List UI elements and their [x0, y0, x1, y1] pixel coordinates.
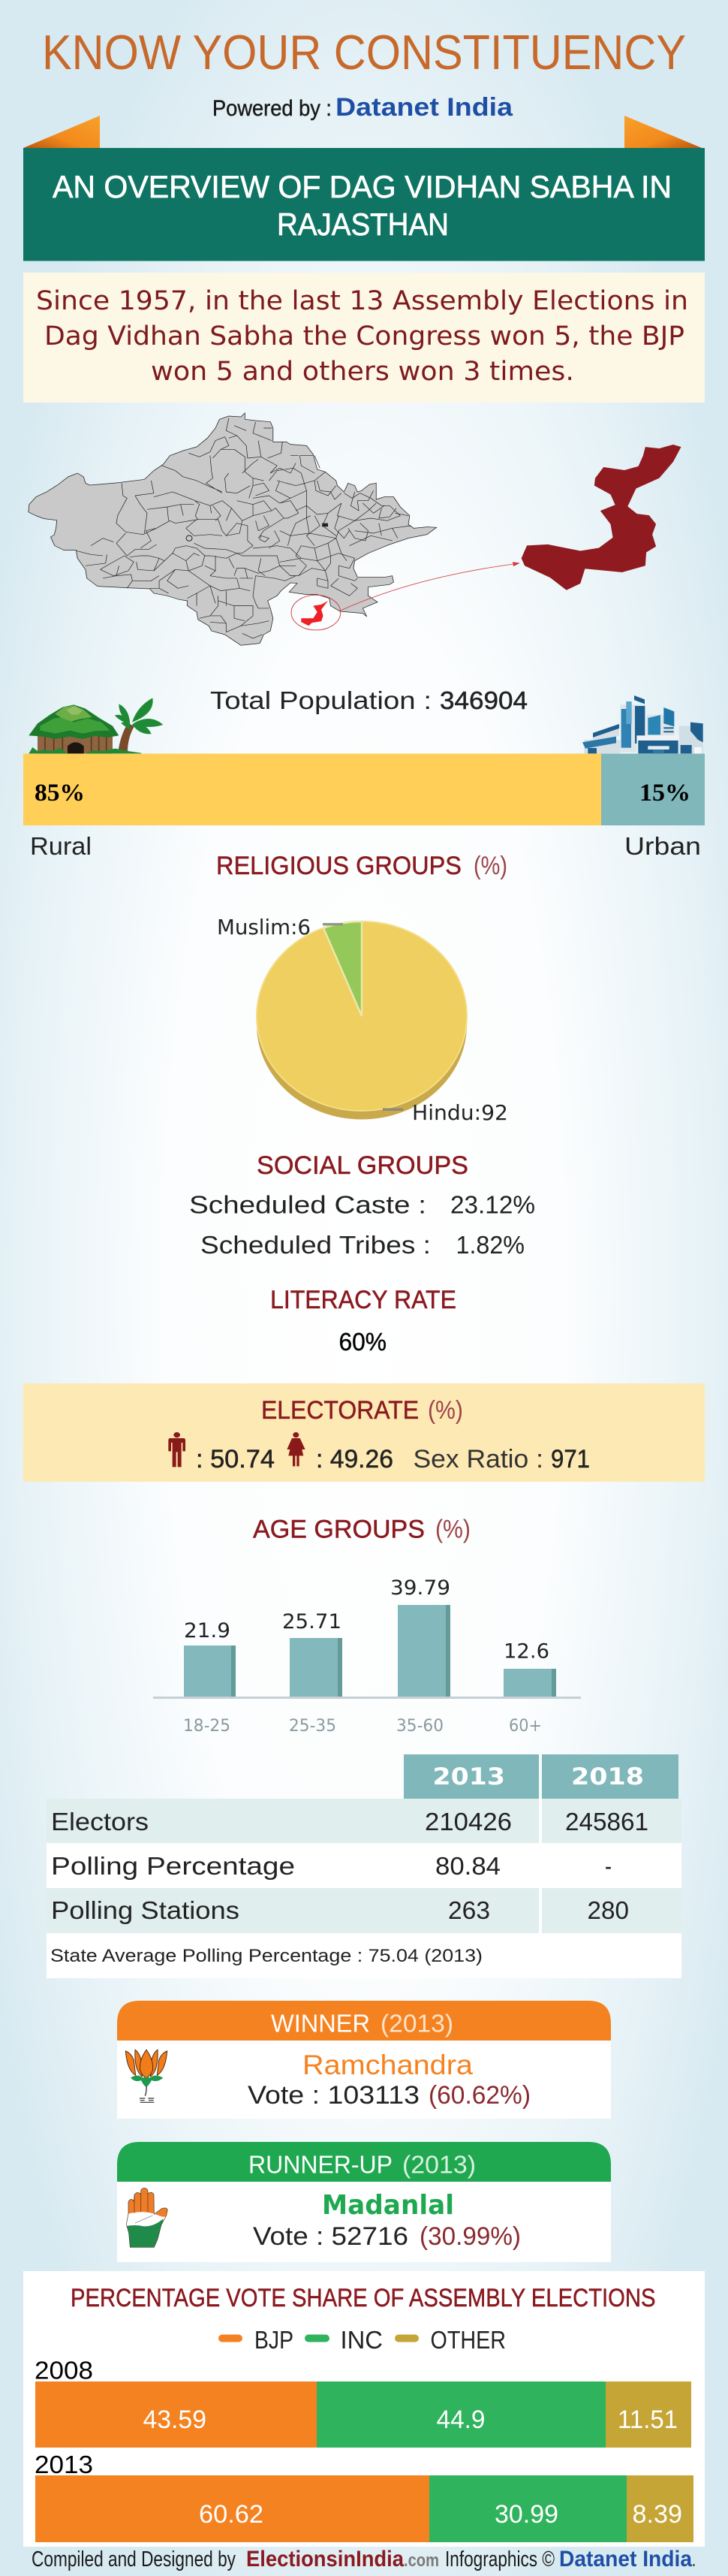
table: electors and polling: 2018: [571, 1763, 644, 1790]
legend: [218, 2326, 506, 2354]
powered by line: Powered by :: [212, 96, 332, 121]
footer credits: Compiled and Designed by: [32, 2547, 236, 2571]
panel: runner-up: Vote : 52716: [253, 2222, 408, 2251]
social groups figures: [189, 1191, 535, 1259]
bar chart: age groups: 18-25: [183, 1717, 230, 1736]
banner: [23, 148, 705, 261]
panel: runner-up: (30.99%): [420, 2222, 521, 2251]
table: electors and polling: Polling Stations: [51, 1896, 239, 1924]
total population: Total Population :: [210, 686, 432, 714]
powered by line: [212, 93, 513, 122]
panel: electorate: (%): [428, 1396, 463, 1425]
panel: electorate: : 49.26: [316, 1445, 393, 1474]
heading: literacy rate: LITERACY RATE: [270, 1286, 456, 1314]
panel: winner: (60.62%): [429, 2081, 531, 2110]
stacked bar: 2013: [35, 2451, 693, 2542]
table: electors and polling: 80.84: [435, 1852, 501, 1880]
footer credits: .com: [404, 2550, 439, 2571]
label: urban: Urban: [624, 832, 701, 860]
table: electors and polling: 280: [587, 1896, 629, 1924]
footer credits: ElectionsinIndia: [246, 2547, 404, 2571]
rural urban bar: [23, 754, 705, 825]
icon: female voter: [287, 1432, 305, 1466]
banner: RAJASTHAN: [277, 207, 449, 242]
icon: INC hand: [125, 2185, 169, 2249]
label: rural: Rural: [30, 832, 92, 860]
footer credits: .: [692, 2547, 696, 2571]
icon: urban buildings: [582, 695, 703, 753]
panel: electorate: : 50.74: [196, 1445, 275, 1474]
heading: age groups: (%): [435, 1516, 471, 1544]
social groups figures: Scheduled Caste :: [189, 1191, 426, 1218]
stacked bar: 2008: 43.59: [143, 2406, 206, 2434]
bar chart: age groups: 25.71: [282, 1610, 341, 1633]
map: enlarged Dag constituency: [522, 445, 681, 590]
social groups figures: Scheduled Tribes :: [200, 1231, 431, 1259]
stacked bar: 2008: [35, 2357, 691, 2448]
panel: winner: Ramchandra: [302, 2050, 473, 2080]
icon: rural hut and palm: [29, 698, 163, 753]
table: electors and polling: 263: [448, 1896, 490, 1924]
table: electors and polling: -: [605, 1852, 612, 1880]
panel: electorate: ELECTORATE: [261, 1396, 419, 1425]
bar chart: age groups: 25-35: [289, 1717, 336, 1736]
legend: INC: [341, 2326, 383, 2354]
table: electors and polling: 2013: [432, 1763, 505, 1790]
bar chart: age groups: 60+: [509, 1717, 542, 1736]
panel: runner-up: RUNNER-UP: [248, 2150, 393, 2178]
panel: electorate: Sex Ratio :: [413, 1445, 543, 1474]
bar chart: age groups: 35-60: [396, 1717, 444, 1736]
summary callout: Dag Vidhan Sabha the Congress won 5, the BJP: [44, 321, 684, 351]
panel: winner: (2013): [381, 2010, 453, 2037]
arrow to enlarged constituency: [341, 562, 520, 611]
stacked bar: 2008: 44.9: [437, 2406, 485, 2434]
stacked bar: 2013: 30.99: [495, 2500, 558, 2529]
stacked bar: 2008: 11.51: [618, 2406, 678, 2434]
social groups figures: 1.82%: [456, 1231, 525, 1259]
panel: vote share: [23, 2271, 705, 2547]
bar chart: age groups: [153, 1576, 581, 1736]
ribbon fold left: [23, 116, 100, 148]
pie chart: religious groups: Muslim:6: [217, 915, 311, 940]
legend: OTHER: [431, 2326, 506, 2354]
table: electors and polling: Electors: [51, 1808, 149, 1835]
table: electors and polling: State Average Polling Percentage : 75.04 (2013): [50, 1946, 483, 1966]
map: Rajasthan districts: [29, 413, 437, 645]
ribbon fold right: [624, 116, 702, 148]
legend: BJP: [254, 2326, 293, 2354]
panel: electorate: 971: [551, 1445, 590, 1474]
stacked bar: 2013: 2013: [35, 2451, 93, 2478]
table: electors and polling: Polling Percentage: [51, 1852, 295, 1880]
pie chart: religious groups: Hindu:92: [412, 1100, 508, 1125]
panel: electorate: [23, 1383, 705, 1482]
heading: social groups: SOCIAL GROUPS: [257, 1151, 468, 1180]
footer credits: Infographics ©: [445, 2547, 555, 2571]
heading: religious groups: RELIGIOUS GROUPS: [216, 852, 462, 880]
stacked bar: 2013: 60.62: [199, 2500, 263, 2529]
title: KNOW YOUR CONSTITUENCY: [42, 25, 686, 80]
panel: runner-up: [117, 2142, 611, 2262]
table: electors and polling: 210426: [425, 1808, 512, 1835]
panel: runner-up: (2013): [402, 2150, 476, 2178]
powered by line: Datanet India: [335, 93, 513, 122]
total population: [210, 686, 528, 714]
summary callout: won 5 and others won 3 times.: [151, 357, 574, 387]
footer credits: Datanet India: [559, 2547, 692, 2571]
panel: winner: [117, 2001, 611, 2119]
table: electors and polling: [47, 1754, 681, 1978]
heading: religious groups: (%): [474, 852, 507, 880]
total population: 346904: [440, 686, 528, 714]
table: electors and polling: 245861: [565, 1808, 648, 1835]
panel: winner: WINNER: [271, 2010, 370, 2037]
banner: AN OVERVIEW OF DAG VIDHAN SABHA IN: [53, 169, 672, 204]
bar chart: age groups: 12.6: [504, 1640, 549, 1663]
social groups figures: 23.12%: [450, 1191, 535, 1218]
heading: age groups: AGE GROUPS: [253, 1516, 425, 1544]
summary callout: Since 1957, in the last 13 Assembly Elections in: [36, 286, 688, 316]
icon: male voter: [168, 1432, 185, 1467]
bar chart: age groups: 39.79: [390, 1576, 450, 1600]
icon: BJP lotus: [125, 2050, 167, 2102]
literacy value: 60%: [339, 1328, 387, 1356]
footer credits: [32, 2547, 696, 2571]
panel: winner: Vote : 103113: [248, 2081, 420, 2110]
stacked bar: 2013: 8.39: [632, 2500, 682, 2529]
summary callout: [23, 273, 705, 403]
pie chart: religious groups: [217, 915, 508, 1125]
stacked bar: 2008: 2008: [35, 2357, 93, 2384]
rural urban bar: 85%: [35, 780, 85, 807]
panel: runner-up: Madanlal: [322, 2190, 454, 2221]
rural urban bar: 15%: [639, 780, 690, 807]
bar chart: age groups: 21.9: [184, 1619, 230, 1642]
